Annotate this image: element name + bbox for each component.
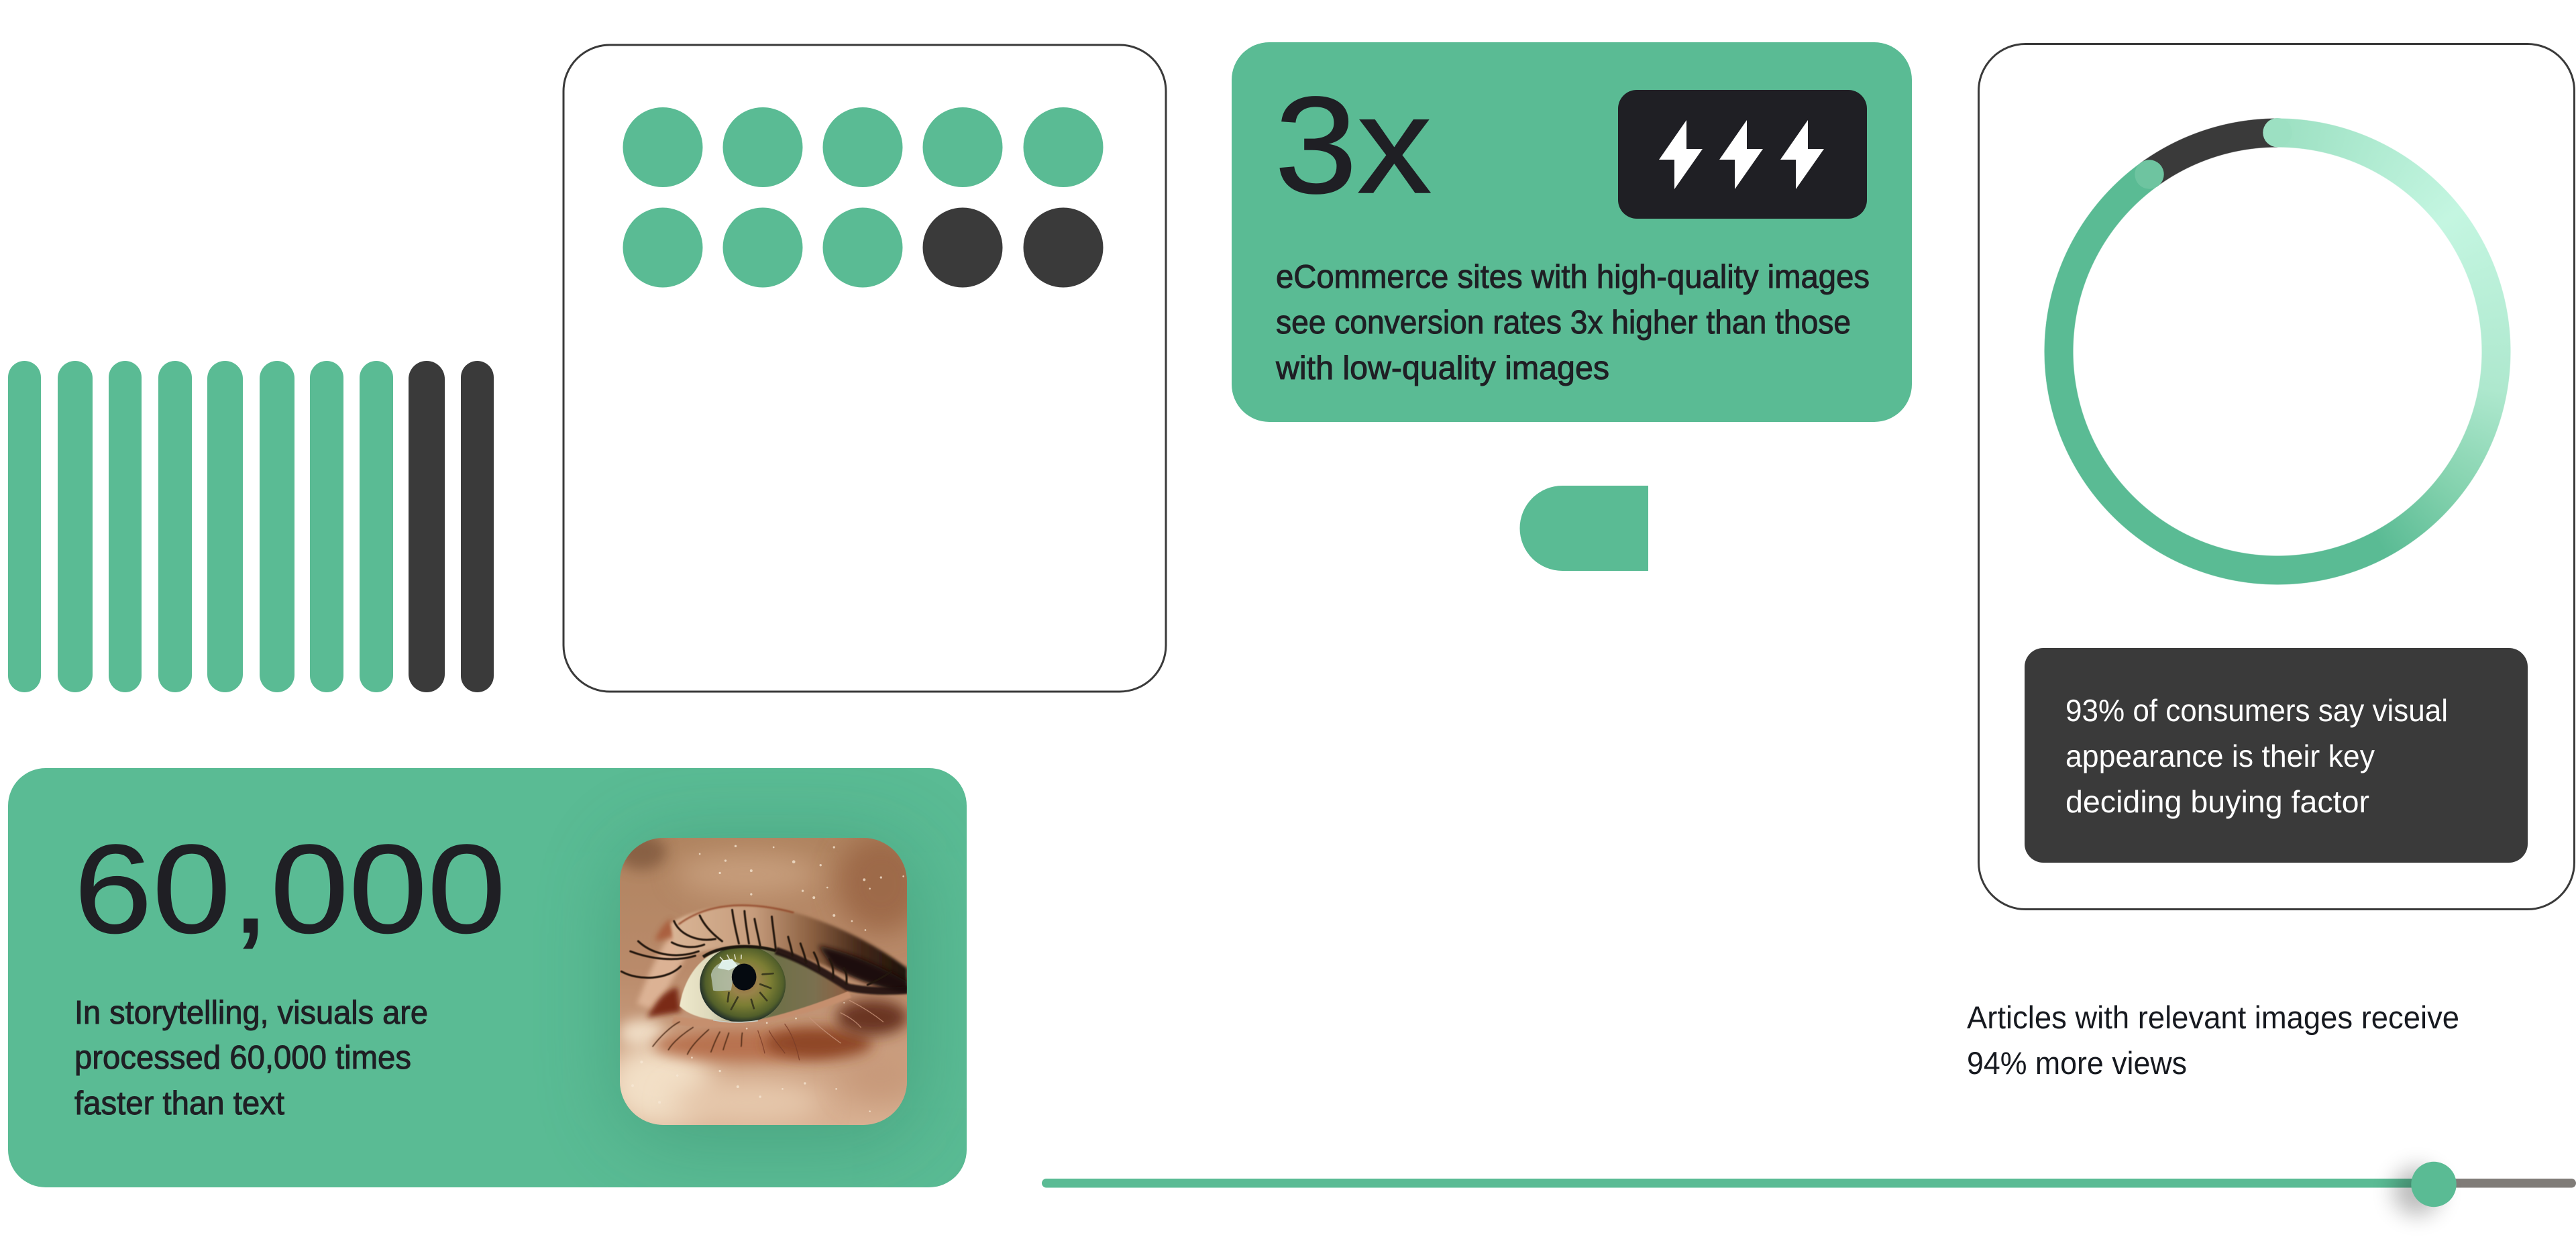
slider knob [2411,1162,2457,1207]
callout: 93% of consumers: 93% of consumers say visual [2065,693,2448,728]
stat: 3x: 3x [1275,68,1432,222]
skin highlights [631,845,904,1112]
text: 60,000 description: processed 60,000 times [74,1040,411,1076]
text: 60,000 description [74,995,428,1122]
panel: 93% ring card [1979,44,2575,910]
decorative green pill tab [1520,486,1648,571]
text: articles statistic: Articles with relevant images receive [1967,1000,2459,1035]
dot row 1 [623,107,1103,187]
callout: 93% of consumers: appearance is their key [2065,739,2375,773]
callout: 93% of consumers: deciding buying factor [2065,784,2369,819]
text: 3x description: with low-quality images [1275,350,1609,386]
slider: 94 percent progress [1042,1162,2576,1216]
text: articles statistic: 94% more views [1967,1045,2187,1081]
slider track filled [1042,1179,2424,1187]
dot row 2 [623,208,1103,287]
slider knob shadow [2393,1167,2441,1216]
slider track remainder [2348,1179,2576,1187]
text: 3x description [1275,259,1870,386]
upper lashes [621,910,891,985]
donut chart: 93 percent [2044,118,2511,585]
panel: dot grid frame [564,45,1166,692]
stat: 60,000: 60,000 [74,818,506,959]
panel: 60,000 card [8,768,967,1187]
text: 60,000 description: In storytelling, visuals are [74,995,428,1031]
callout: 93% of consumers [2025,648,2528,863]
text: 60,000 description: faster than text [74,1085,284,1122]
lower lashes [653,1022,742,1055]
text: 3x description: see conversion rates 3x higher than those [1276,305,1851,341]
panel: 3x conversion card [1232,42,1912,422]
image: close-up of a green eye [620,838,907,1125]
text: 3x description: eCommerce sites with high-quality images [1276,259,1870,295]
bar row: ten vertical pills [8,361,494,692]
text: articles statistic [1967,1000,2459,1081]
icon box: three lightning bolts [1618,90,1867,219]
